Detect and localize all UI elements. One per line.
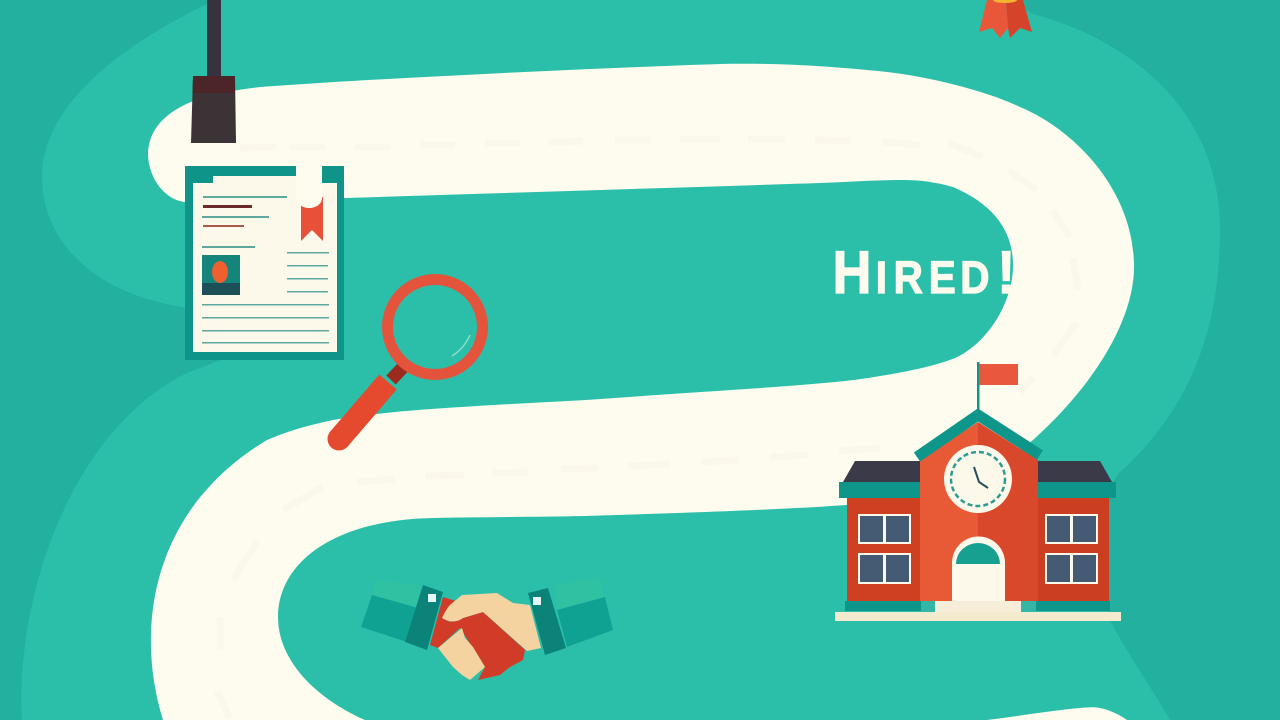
right wing [1036, 461, 1116, 602]
heading: Hired!: E [929, 253, 956, 304]
door [952, 536, 1005, 602]
heading: Hired!: ! [997, 239, 1015, 307]
winding road [148, 64, 1134, 720]
heading: Hired!: D [960, 253, 990, 304]
heading: Hired!: R [894, 253, 923, 304]
left wing [839, 461, 921, 602]
clock [944, 445, 1012, 513]
road centre dashes [217, 139, 1078, 718]
road segment at bottom right [987, 707, 1127, 720]
left sleeve [372, 580, 420, 608]
icon: school building [835, 362, 1121, 621]
bookmark holder [296, 164, 322, 208]
light fist [438, 628, 485, 680]
left cuff [405, 585, 443, 650]
right cuff [528, 588, 566, 655]
central tower [917, 415, 1040, 602]
icon: magnifying glass [328, 280, 482, 450]
resume text lines [202, 196, 329, 344]
bookmark ribbon [301, 197, 323, 241]
heading: Hired!: I [876, 253, 887, 304]
icon: award ribbon [979, 0, 1032, 38]
heading: Hired!: H [833, 239, 871, 307]
right sleeve [555, 577, 605, 610]
resume photo [202, 255, 240, 295]
light hand [442, 593, 541, 651]
flag [977, 362, 1018, 412]
icon: black clip [191, 0, 236, 143]
windows [859, 515, 1097, 583]
base and steps [835, 601, 1121, 621]
icon: resume document [185, 164, 344, 360]
red hand [430, 597, 525, 680]
icon: handshake [361, 577, 613, 680]
